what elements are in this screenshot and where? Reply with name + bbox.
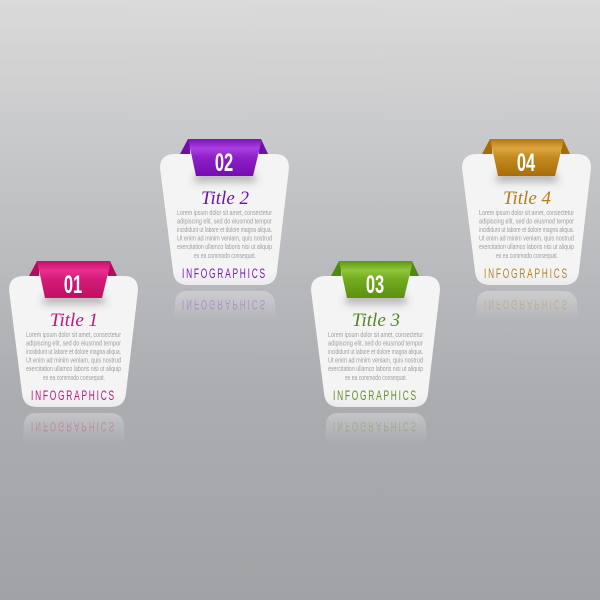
card body 2: [160, 154, 289, 285]
ribbon 1: [29, 261, 117, 299]
body text 2: incididunt ut labore et dolore magna aliqua.: [177, 225, 272, 234]
body text 3: adipiscing elit, sed do eiusmod tempor: [328, 338, 423, 348]
ribbon 4: [482, 139, 570, 177]
reflection 1: [23, 413, 125, 443]
reflection 2: INFOGRAPHICS: [182, 296, 265, 311]
card body 3: [311, 276, 440, 407]
number 4: 04: [517, 150, 535, 177]
body text 2: Ut enim ad minim veniam, quis nostrud: [177, 234, 272, 242]
ribbon shadow 2: [193, 172, 257, 182]
body text 4: [479, 208, 574, 260]
infographics label 1: INFOGRAPHICS: [31, 389, 114, 404]
title 4: Title 4: [503, 188, 552, 209]
body text 3: ex ea commodo consequat.: [345, 373, 407, 382]
body text 1: [26, 330, 121, 382]
body text 2: exercitation ullamco laboris nisi ut aliquip: [177, 242, 272, 251]
panel: card 2: [160, 139, 289, 321]
body text 1: adipiscing elit, sed do eiusmod tempor: [26, 338, 121, 348]
number 2: 02: [215, 150, 233, 177]
reflection 4: INFOGRAPHICS: [484, 296, 567, 311]
reflection 2: [174, 291, 276, 321]
body text 3: incididunt ut labore et dolore magna aliqua.: [328, 347, 423, 356]
title 3: Title 3: [352, 310, 400, 331]
infographics label 2: INFOGRAPHICS: [182, 267, 265, 282]
body text 3: Ut enim ad minim veniam, quis nostrud: [328, 356, 423, 364]
panel: card 3: [311, 261, 440, 443]
body text 3: exercitation ullamco laboris nisi ut aliquip: [328, 364, 423, 373]
title 2: Title 2: [201, 188, 250, 209]
card body 4: [462, 154, 591, 285]
card body 1: [9, 276, 138, 407]
body text 1: Ut enim ad minim veniam, quis nostrud: [26, 356, 121, 364]
reflection 4: [476, 291, 578, 321]
ribbon shadow 3: [344, 294, 408, 304]
body text 3: [328, 330, 423, 382]
ribbon 2: [180, 139, 268, 177]
ribbon shadow 1: [42, 294, 106, 304]
infographics label 3: INFOGRAPHICS: [333, 389, 416, 404]
panel: card 4: [462, 139, 591, 321]
body text 1: Lorem ipsum dolor sit amet, consectetur: [26, 330, 121, 339]
body text 4: ex ea commodo consequat.: [496, 251, 558, 260]
infographics label 4: INFOGRAPHICS: [484, 267, 567, 282]
ribbon 3: [331, 261, 419, 299]
body text 2: Lorem ipsum dolor sit amet, consectetur: [177, 208, 272, 217]
reflection 3: INFOGRAPHICS: [333, 418, 416, 433]
title 1: Title 1: [50, 310, 98, 331]
body text 2: ex ea commodo consequat.: [194, 251, 256, 260]
reflection 3: [325, 413, 427, 443]
panel: card 1: [9, 261, 138, 443]
ribbon shadow 4: [495, 172, 559, 182]
body text 1: ex ea commodo consequat.: [43, 373, 105, 382]
number 1: 01: [64, 272, 82, 299]
reflection 1: INFOGRAPHICS: [31, 418, 114, 433]
body text 3: Lorem ipsum dolor sit amet, consectetur: [328, 330, 423, 339]
body text 1: incididunt ut labore et dolore magna aliqua.: [26, 347, 121, 356]
body text 2: [177, 208, 272, 260]
number 3: 03: [366, 272, 384, 299]
body text 1: exercitation ullamco laboris nisi ut aliquip: [26, 364, 121, 373]
body text 2: adipiscing elit, sed do eiusmod tempor: [177, 216, 272, 226]
